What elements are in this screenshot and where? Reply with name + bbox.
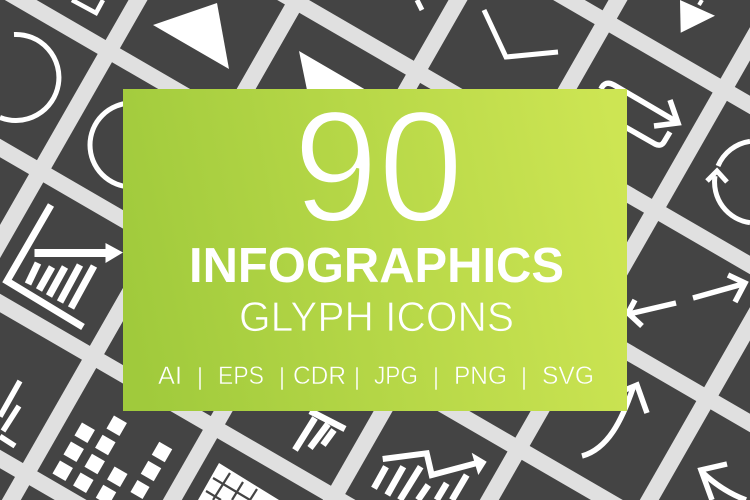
panel: title block xyxy=(123,79,627,411)
subheading: GLYPH ICONS xyxy=(239,293,514,340)
icon: horizontal bars under panel xyxy=(295,411,345,450)
icon: bar chart with trend arrow xyxy=(374,453,487,500)
title number: 90 xyxy=(293,79,463,255)
icon: square grid xyxy=(52,415,172,500)
format list: EPS xyxy=(218,362,264,390)
format list: | xyxy=(433,363,439,391)
format list xyxy=(158,362,594,391)
icon: ring arc center xyxy=(90,103,174,187)
icon: bar chart with arrow xyxy=(7,205,123,327)
icon: curved arrow bottom right xyxy=(701,464,746,500)
icon: small chart bottom left xyxy=(0,381,20,446)
format list: SVG xyxy=(542,362,594,390)
format list: | xyxy=(521,363,527,391)
icon: circular arrow right xyxy=(707,141,750,223)
icon: double arrow xyxy=(628,275,745,326)
format list: | xyxy=(354,363,360,391)
icon: curved arrow xyxy=(582,385,647,456)
icon: loop arrow xyxy=(601,83,678,145)
heading: INFOGRAPHICS xyxy=(189,239,564,293)
format list: AI xyxy=(158,362,182,390)
icon: ring arc left xyxy=(0,34,59,120)
format list: CDR xyxy=(293,362,346,390)
format list: | xyxy=(197,363,203,391)
format list: | xyxy=(279,363,285,391)
format list: JPG xyxy=(374,362,418,390)
icon: table xyxy=(198,463,279,500)
format list: PNG xyxy=(454,362,507,390)
icon: triangle xyxy=(153,3,229,69)
icon: square corner top left xyxy=(72,0,103,13)
icon: arrow head top right xyxy=(680,0,715,33)
icon: second triangle xyxy=(299,51,366,90)
icon: chevron line top xyxy=(417,0,558,57)
